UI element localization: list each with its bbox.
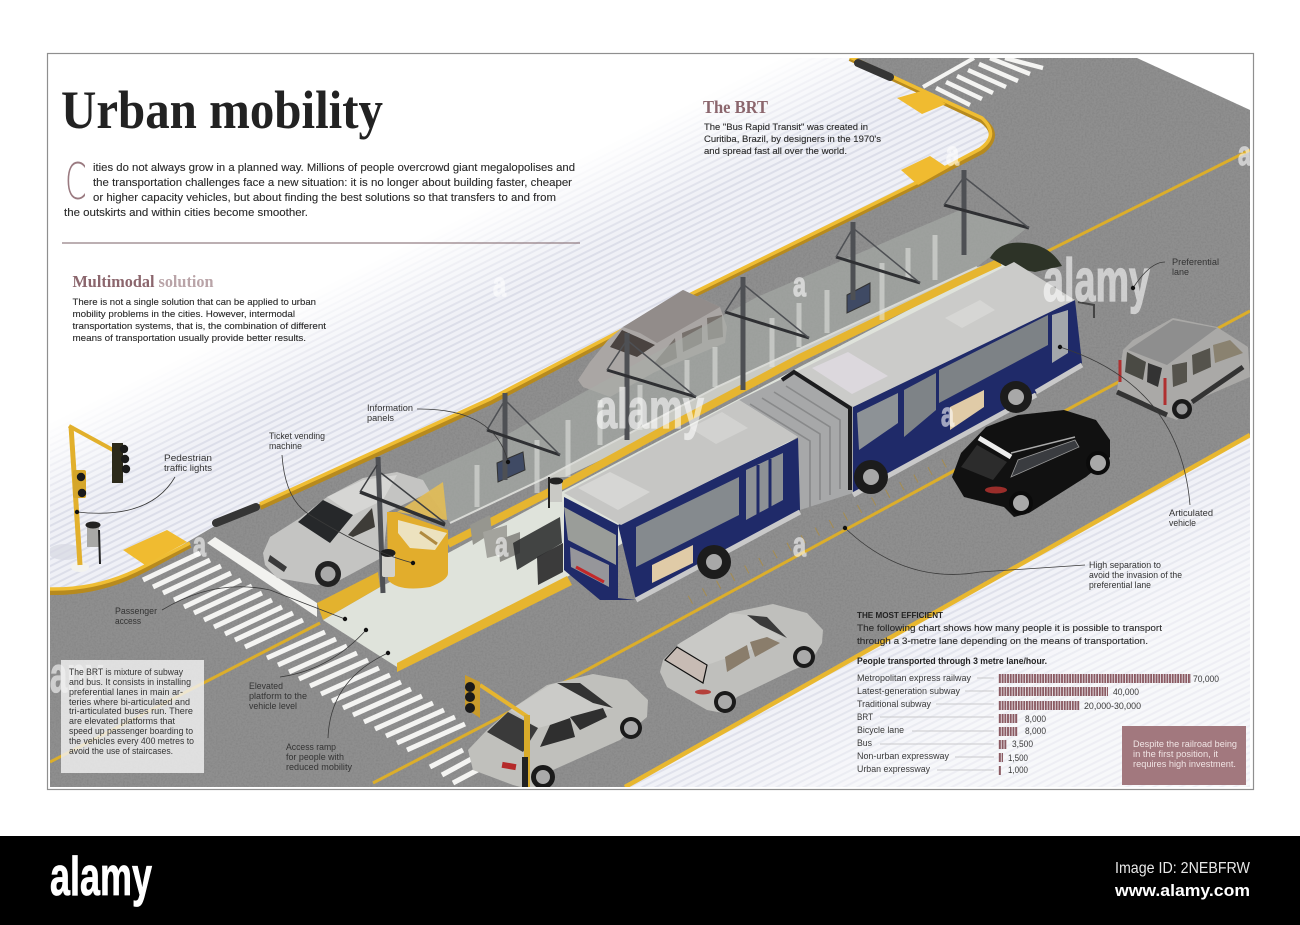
watermarks: alamy — [1043, 247, 1150, 314]
section: Multimodal solution: Multimodal solution — [72, 272, 214, 291]
chart row labels: Non-urban expressway — [857, 751, 949, 761]
callout labels: Pedestrian — [164, 453, 212, 463]
image credit — [1114, 860, 1251, 900]
section: Multimodal solution: transportation systems, that is, the combination of different — [72, 320, 326, 331]
alamy logo: alamy — [50, 845, 152, 907]
section: Multimodal solution: There is not a single solution that can be applied to urban — [72, 296, 316, 307]
intro text: C — [65, 152, 87, 211]
watermarks: a — [493, 266, 507, 304]
callout labels: Preferential — [1172, 257, 1219, 267]
info box: BRT mixture — [61, 660, 204, 773]
chart values — [1008, 674, 1219, 775]
outer frame — [48, 54, 1254, 790]
chart values: 40,000 — [1113, 687, 1139, 697]
chart values: 8,000 — [1025, 726, 1046, 736]
information panels — [497, 283, 870, 482]
callout labels: vehicle — [1169, 518, 1196, 528]
front windows — [857, 393, 898, 450]
callout labels: High separation to — [1089, 560, 1161, 570]
section: The BRT: Curitiba, Brazil, by designers in the 1970's — [704, 133, 881, 144]
info box: BRT mixture: The BRT is mixture of subway — [69, 667, 184, 677]
callout labels: panels — [367, 413, 395, 423]
section: The BRT: and spread fast all over the world. — [704, 145, 847, 156]
silver hatchback — [660, 604, 823, 713]
white stop band — [207, 537, 317, 617]
shelter masts — [487, 170, 1029, 480]
chart row labels: Latest-generation subway — [857, 686, 960, 696]
callout labels — [115, 257, 1219, 772]
callout labels: Ticket vending — [269, 431, 325, 441]
grey van on the right — [1117, 318, 1250, 420]
callout labels: machine — [269, 441, 302, 451]
yellow ramps on sidewalk corners — [123, 90, 948, 565]
watermarks: a — [946, 135, 960, 173]
section: The BRT — [703, 97, 881, 156]
litter bin — [86, 522, 100, 564]
info box: BRT mixture: the vehicles every 400 metres to — [69, 736, 194, 746]
chart row labels — [857, 673, 971, 774]
image credit: www.alamy.com — [1114, 881, 1250, 900]
yellow kerb of lower sidewalk — [625, 435, 1250, 787]
platform front kerb — [397, 576, 572, 672]
leader lines — [75, 262, 1190, 738]
chart values: 1,500 — [1008, 753, 1028, 763]
chart values: 1,000 — [1008, 765, 1028, 775]
intro text — [64, 152, 575, 219]
info box: BRT mixture: speed up passenger boarding to — [69, 726, 193, 736]
bus shelter: platform, glass and masts — [317, 170, 1062, 672]
rear windows — [636, 477, 739, 567]
mirror — [1078, 302, 1094, 318]
callout labels: preferential lane — [1089, 580, 1151, 590]
callout labels: access — [115, 616, 142, 626]
chart values: 20,000-30,000 — [1084, 701, 1141, 711]
beige van behind shelter — [578, 290, 727, 397]
callout labels: Articulated — [1169, 508, 1213, 518]
info box: BRT mixture: are elevated platforms that — [69, 716, 176, 726]
intro text: the outskirts and within cities become smoother. — [64, 207, 308, 219]
front section body — [853, 300, 1082, 493]
turnstiles and access fence — [470, 515, 563, 585]
black SUV — [952, 410, 1110, 517]
callout labels: vehicle level — [249, 701, 297, 711]
rear advert panel — [652, 545, 693, 583]
callout labels: Access ramp — [286, 742, 336, 752]
chart: the most efficient: The following chart shows how many people it is possible to transport — [857, 622, 1162, 633]
road surface — [50, 58, 1250, 787]
callout: railroad investment: in the first position, it — [1133, 749, 1219, 759]
footer band — [0, 836, 1300, 925]
info box: BRT mixture: preferential lanes in main ar- — [69, 687, 183, 697]
front roof — [796, 262, 1075, 407]
info box: BRT mixture: avoid the use of staircases. — [69, 746, 173, 756]
shelter rail — [450, 267, 977, 523]
rear section body — [618, 438, 800, 600]
chart row labels: Bicycle lane — [857, 725, 904, 735]
divider — [62, 242, 580, 244]
lower sidewalk — [625, 435, 1250, 787]
litter bin on platform — [549, 477, 563, 508]
section: Multimodal solution: mobility problems in the cities. However, intermodal — [72, 308, 295, 319]
watermarks: a — [1238, 135, 1252, 173]
section: The BRT: The "Bus Rapid Transit" was created in — [704, 121, 868, 132]
bellows articulation — [739, 372, 853, 510]
lane lines — [50, 150, 1250, 783]
callout labels: for people with — [286, 752, 344, 762]
glass posts — [477, 235, 935, 507]
wheels — [697, 545, 731, 579]
callout labels: reduced mobility — [286, 762, 353, 772]
watermarks: alamy — [596, 377, 704, 440]
callout labels: Elevated — [249, 681, 283, 691]
watermarks: any — [50, 647, 103, 703]
back yellow wall — [448, 262, 1000, 544]
chart values: 8,000 — [1025, 714, 1046, 724]
chart row labels: Traditional subway — [857, 699, 931, 709]
callout labels: Information — [367, 403, 413, 413]
lower trim — [636, 365, 1082, 600]
lower traffic light — [465, 675, 528, 787]
watermarks: a — [495, 526, 509, 564]
upper sidewalk — [50, 58, 992, 593]
callout: railroad investment: requires high investment. — [1133, 759, 1236, 769]
yellow kerb of upper sidewalk — [50, 58, 992, 592]
silver car at the bottom — [468, 674, 648, 790]
intro text: or higher capacity vehicles, but about finding the best solutions so that transfers to and from — [93, 192, 556, 204]
chart: the most efficient — [857, 610, 1219, 775]
pedestrian traffic lights — [48, 426, 130, 572]
ticket vending machine booth — [387, 482, 448, 588]
chart leader lines — [880, 678, 994, 770]
illustration: isometric street scene — [48, 57, 1252, 790]
info box: BRT mixture: teries where bi-articulated and — [69, 697, 190, 707]
trees behind the shelter — [990, 243, 1062, 272]
front shelter mast and bin — [360, 457, 445, 593]
glass shelter walls and roof — [417, 210, 1027, 523]
callout labels: Passenger — [115, 606, 157, 616]
callout: railroad investment: Despite the railroad being — [1133, 739, 1237, 749]
crosswalk: left — [143, 553, 303, 647]
black bumpers — [216, 63, 890, 523]
chart: the most efficient: through a 3-metre lane depending on the means of transportation. — [857, 635, 1148, 646]
lane separation posts — [690, 463, 945, 600]
chart values: 70,000 — [1193, 674, 1219, 684]
intro text: the transportation challenges face a new situation: it is no longer about building faster, cheaper — [93, 177, 572, 189]
silver car behind ticket booth — [263, 472, 430, 587]
chart row labels: Urban expressway — [857, 764, 930, 774]
articulated bus — [564, 262, 1094, 600]
callout labels: traffic lights — [164, 463, 213, 473]
callout: railroad investment — [1122, 726, 1246, 785]
section: Multimodal solution — [72, 272, 326, 343]
chart row labels: Metropolitan express railway — [857, 673, 971, 683]
watermarks — [50, 135, 1252, 703]
crosswalk: right — [267, 632, 487, 783]
chart bars — [998, 674, 1191, 775]
platform floor — [323, 262, 1040, 667]
callout labels: platform to the — [249, 691, 307, 701]
section: Multimodal solution: means of transportation usually provide better results. — [72, 332, 306, 343]
front advert panel — [950, 390, 984, 430]
info box: BRT mixture: tri-articulated buses run. There — [69, 706, 193, 716]
chart values: 3,500 — [1012, 739, 1033, 749]
watermarks: a — [193, 526, 207, 564]
callout labels: avoid the invasion of the — [1089, 570, 1182, 580]
chart row labels: Bus — [857, 738, 872, 748]
callout labels: lane — [1172, 267, 1189, 277]
title: Urban mobility — [61, 80, 383, 140]
chart: the most efficient: People transported through 3 metre lane/hour. — [857, 656, 1047, 666]
watermarks: a — [941, 396, 955, 434]
image credit: Image ID: 2NEBFRW — [1115, 860, 1251, 877]
watermarks: a — [793, 266, 807, 304]
info box: BRT mixture: and bus. It consists in installing — [69, 677, 191, 687]
section: The BRT: The BRT — [703, 97, 768, 117]
watermarks: a — [793, 526, 807, 564]
intro text: ities do not always grow in a planned way. Millions of people overcrowd giant megalopolises and — [93, 162, 575, 174]
rear face — [564, 497, 636, 600]
chart: the most efficient: THE MOST EFFICIENT — [857, 610, 944, 620]
chart row labels: BRT — [857, 712, 873, 722]
rear roof — [564, 400, 798, 525]
crosswalk: top — [923, 58, 1043, 105]
